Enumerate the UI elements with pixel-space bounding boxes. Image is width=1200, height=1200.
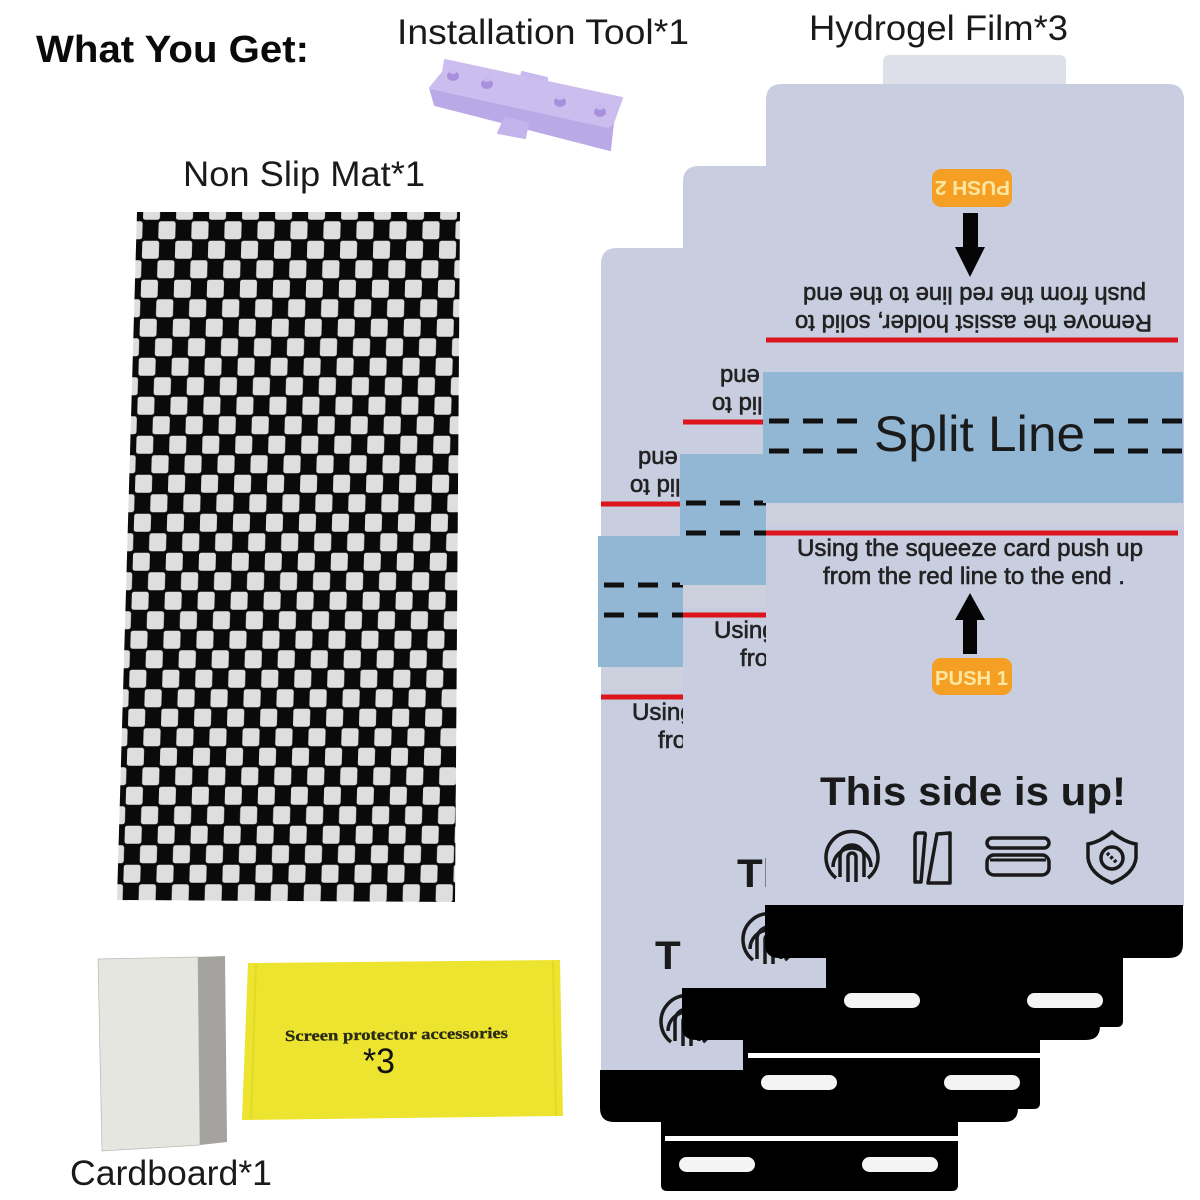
film card: back copy: push from the red line to the end bbox=[638, 445, 981, 472]
push 2 badge bbox=[932, 169, 1012, 207]
tab slot left bbox=[844, 993, 920, 1008]
red line top bbox=[766, 338, 1178, 342]
film card: middle copy: push from the red line to the end bbox=[720, 363, 1063, 390]
push 1 badge: PUSH 1 bbox=[935, 668, 1008, 690]
white line on middle tab bbox=[748, 1053, 1040, 1058]
label: installation tool: Installation Tool*1 bbox=[397, 13, 689, 52]
icon: card bbox=[987, 838, 1049, 875]
this side is up text: This side is up! bbox=[820, 770, 1126, 814]
split line text: Split Line bbox=[874, 406, 1085, 462]
label: non slip mat: Non Slip Mat*1 bbox=[183, 155, 425, 194]
band lower fade bbox=[766, 503, 1184, 525]
film card: back copy: from the red line to the end . bbox=[658, 727, 960, 754]
push 2 badge: PUSH 2 bbox=[935, 176, 1010, 198]
split dashes bbox=[769, 421, 1182, 451]
icon: bend film bbox=[915, 833, 950, 883]
tab slot right bbox=[1027, 993, 1103, 1008]
film card: middle copy bbox=[680, 166, 1101, 1109]
film card: front copy bbox=[763, 55, 1184, 1027]
icon: fingerprint bbox=[826, 832, 878, 882]
cardboard squeegee bbox=[98, 956, 227, 1151]
icon: shield bbox=[1088, 832, 1136, 883]
film card: middle copy: Using the squeeze card push up bbox=[714, 617, 1060, 644]
upside-down instruction line 2: push from the red line to the end bbox=[803, 281, 1146, 308]
upside-down instruction line 1: Remove the assist holder, solid to bbox=[795, 309, 1152, 336]
label: cardboard: Cardboard*1 bbox=[70, 1154, 272, 1193]
non slip mat bbox=[117, 212, 460, 902]
film card: back copy bbox=[598, 248, 1019, 1191]
film card: middle copy: from the red line to the end . bbox=[740, 645, 1042, 672]
film card: back copy: Remove the assist holder, solid to bbox=[630, 473, 987, 500]
push 1 badge bbox=[932, 658, 1012, 695]
film card: back copy: This side is up! bbox=[655, 934, 961, 978]
split band bbox=[763, 372, 1183, 503]
film card: middle copy: This side is up! bbox=[737, 852, 1043, 896]
arrow down bbox=[955, 213, 985, 277]
card body bbox=[766, 84, 1184, 906]
icon: purple installation tool bbox=[430, 60, 622, 150]
yellow accessories packet: *3 bbox=[363, 1042, 395, 1081]
title: What You Get: bbox=[36, 29, 309, 71]
label: hydrogel film: Hydrogel Film*3 bbox=[809, 9, 1068, 48]
red line bottom bbox=[766, 530, 1178, 536]
yellow accessories packet: Screen protector accessories bbox=[285, 1025, 508, 1045]
film card: middle copy: Remove the assist holder, solid to bbox=[712, 391, 1069, 418]
instruction line 1: Using the squeeze card push up bbox=[797, 535, 1143, 562]
instruction line 2: from the red line to the end . bbox=[823, 563, 1125, 590]
black holder bar and tab bbox=[765, 905, 1183, 1027]
arrow up bbox=[955, 593, 985, 654]
yellow accessories packet bbox=[242, 960, 563, 1120]
film pull tab bbox=[883, 55, 1066, 96]
film card: back copy: Using the squeeze card push up bbox=[632, 699, 978, 726]
white line on back tab bbox=[665, 1136, 958, 1141]
